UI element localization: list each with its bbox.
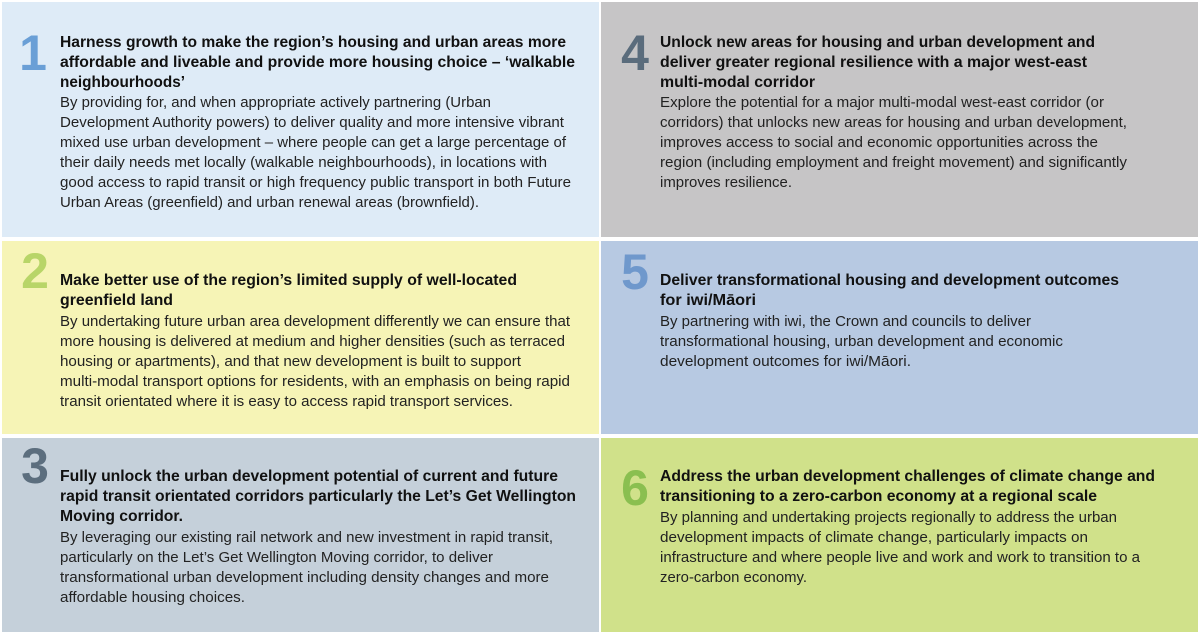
- body text 4: corridors) that unlocks new areas for housing and urban development,: [660, 115, 1127, 131]
- number 2: 2: [21, 243, 49, 299]
- number 6: 6: [621, 460, 649, 516]
- body text 6: By planning and undertaking projects regionally to address the urban: [660, 510, 1117, 526]
- heading 3: rapid transit orientated corridors particularly the Let’s Get Wellington: [60, 488, 576, 505]
- heading 6: [660, 468, 1155, 505]
- body text 3: By leveraging our existing rail network and new investment in rapid transit,: [60, 530, 553, 546]
- heading 2: greenfield land: [60, 292, 173, 309]
- body text 2: By undertaking future urban area development differently we can ensure that: [60, 314, 570, 330]
- heading 1: [60, 34, 575, 91]
- heading 1: Harness growth to make the region’s housing and urban areas more: [60, 34, 566, 51]
- body text 5: By partnering with iwi, the Crown and councils to deliver: [660, 314, 1031, 330]
- body text 3: particularly on the Let’s Get Wellington Moving corridor, to deliver: [60, 550, 493, 566]
- body text 6: zero-carbon economy.: [660, 570, 807, 586]
- body text 5: development outcomes for iwi/Māori.: [660, 354, 911, 370]
- heading 3: Moving corridor.: [60, 508, 183, 525]
- panel 5: iwi/Māori outcomes: [601, 241, 1198, 434]
- body text 1: [60, 95, 571, 211]
- body text 3: [60, 530, 553, 606]
- body text 4: [660, 95, 1128, 191]
- body text 4: Explore the potential for a major multi-modal west-east corridor (or: [660, 95, 1104, 111]
- body text 3: affordable housing choices.: [60, 590, 245, 606]
- heading 4: [660, 34, 1095, 91]
- body text 1: By providing for, and when appropriate actively partnering (Urban: [60, 95, 491, 111]
- panel 6: climate change: [601, 438, 1198, 632]
- heading 1: affordable and liveable and provide more housing choice – ‘walkable: [60, 54, 575, 71]
- heading 6: transitioning to a zero-carbon economy at a regional scale: [660, 488, 1097, 505]
- panel 2: greenfield land: [2, 241, 599, 434]
- body text 3: transformational urban development including density changes and more: [60, 570, 549, 586]
- body text 2: multi-modal transport options for residents, with an emphasis on being rapid: [60, 374, 570, 390]
- body text 4: improves access to social and economic opportunities across the: [660, 135, 1098, 151]
- body text 1: mixed use urban development – where people can get a large percentage of: [60, 135, 567, 151]
- heading 2: Make better use of the region’s limited supply of well-located: [60, 272, 517, 289]
- body text 1: good access to rapid transit or high frequency public transport in both Future: [60, 175, 571, 191]
- body text 2: more housing is delivered at medium and higher densities (such as terraced: [60, 334, 565, 350]
- heading 5: [660, 272, 1119, 309]
- heading 4: Unlock new areas for housing and urban development and: [660, 34, 1095, 51]
- heading 3: Fully unlock the urban development potential of current and future: [60, 468, 558, 485]
- number 1: 1: [19, 25, 47, 81]
- panel 1: walkable neighbourhoods: [2, 2, 599, 237]
- number 5: 5: [621, 244, 649, 300]
- body text 4: region (including employment and freight movement) and significantly: [660, 155, 1128, 171]
- body text 2: transit orientated where it is easy to access rapid transport services.: [60, 394, 513, 410]
- body text 1: Development Authority powers) to deliver quality and more intensive vibrant: [60, 115, 564, 131]
- number 4: 4: [621, 25, 649, 81]
- body text 2: housing or apartments), and that new development is built to support: [60, 354, 521, 370]
- number 3: 3: [21, 438, 49, 494]
- body text 4: improves resilience.: [660, 175, 792, 191]
- body text 1: their daily needs met locally (walkable neighbourhoods), in locations with: [60, 155, 547, 171]
- body text 2: [60, 314, 570, 410]
- heading 5: Deliver transformational housing and development outcomes: [660, 272, 1119, 289]
- body text 5: [660, 314, 1063, 370]
- heading 1: neighbourhoods’: [60, 74, 185, 91]
- body text 6: [660, 510, 1141, 586]
- heading 4: multi-modal corridor: [660, 74, 815, 91]
- body text 6: development impacts of climate change, particularly impacts on: [660, 530, 1088, 546]
- body text 6: infrastructure and where people live and work and work to transition to a: [660, 550, 1141, 566]
- panel 3: rapid transit corridors: [2, 438, 599, 632]
- heading 2: [60, 272, 517, 309]
- heading 3: [60, 468, 576, 525]
- panel 4: west-east corridor: [601, 2, 1198, 237]
- heading 6: Address the urban development challenges of climate change and: [660, 468, 1155, 485]
- heading 4: deliver greater regional resilience with a major west-east: [660, 54, 1087, 71]
- heading 5: for iwi/Māori: [660, 292, 756, 309]
- body text 1: Urban Areas (greenfield) and urban renewal areas (brownfield).: [60, 195, 479, 211]
- body text 5: transformational housing, urban development and economic: [660, 334, 1063, 350]
